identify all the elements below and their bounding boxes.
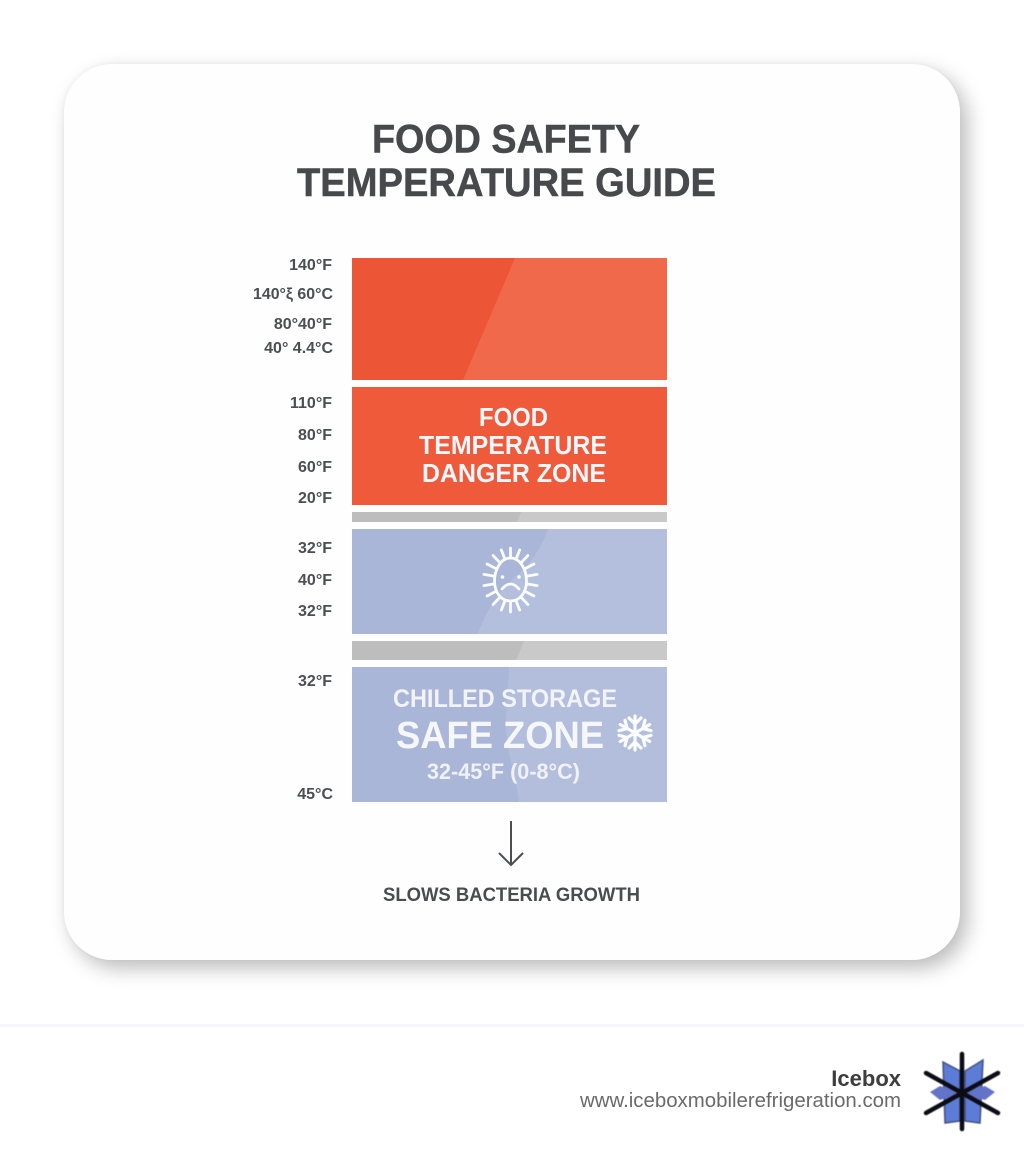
title: TEMPERATURE GUIDE bbox=[297, 161, 716, 205]
title bbox=[297, 118, 716, 205]
bar: wide grey band bbox=[352, 641, 667, 660]
caption: slows bacteria growth: SLOWS BACTERIA GROWTH bbox=[383, 885, 640, 906]
icon: snowflake bbox=[617, 716, 653, 750]
temperature scale labels: 40° 4.4°C bbox=[264, 340, 333, 357]
temperature scale labels: 80°F bbox=[298, 427, 332, 444]
temperature scale labels bbox=[253, 257, 333, 803]
panel: card background bbox=[64, 64, 960, 960]
bar: safe zone band bbox=[352, 667, 667, 802]
temperature scale labels: 110°F bbox=[290, 395, 332, 412]
bar: thin grey band bbox=[352, 512, 667, 522]
footer brand text: www.iceboxmobilerefrigeration.com bbox=[579, 1090, 901, 1112]
safe zone text: SAFE ZONE bbox=[396, 715, 604, 757]
temperature scale labels: 20°F bbox=[298, 490, 332, 507]
temperature scale labels: 140°ξ 60°C bbox=[253, 286, 333, 303]
temperature scale labels: 32°F bbox=[298, 673, 332, 690]
danger zone text: FOOD bbox=[479, 404, 548, 432]
temperature scale labels: 140°F bbox=[289, 257, 332, 274]
temperature scale labels: 32°F bbox=[298, 603, 332, 620]
title: FOOD SAFETY bbox=[372, 118, 640, 162]
bar: danger zone band bbox=[352, 387, 667, 505]
bar: blue band with bacteria bbox=[352, 529, 667, 634]
danger zone text bbox=[419, 404, 607, 488]
safe zone text: 32-45°F (0-8°C) bbox=[427, 759, 580, 784]
bar: upper red band bbox=[352, 258, 667, 380]
temperature scale labels: 80°40°F bbox=[274, 316, 332, 333]
footer brand text bbox=[579, 1066, 902, 1112]
danger zone text: DANGER ZONE bbox=[422, 460, 606, 488]
safe zone text bbox=[393, 685, 617, 784]
icon: sad bacteria bbox=[484, 548, 537, 612]
arrow: down bbox=[499, 821, 523, 865]
temperature scale labels: 60°F bbox=[298, 459, 332, 476]
temperature scale labels: 40°F bbox=[298, 572, 332, 589]
danger zone text: TEMPERATURE bbox=[419, 432, 607, 460]
safe zone text: CHILLED STORAGE bbox=[393, 685, 617, 713]
footer brand text: Icebox bbox=[831, 1066, 902, 1091]
icon: Icebox logo bbox=[926, 1054, 998, 1129]
temperature scale labels: 45°C bbox=[297, 786, 333, 803]
temperature scale labels: 32°F bbox=[298, 540, 332, 557]
footer divider bbox=[0, 1024, 1024, 1027]
